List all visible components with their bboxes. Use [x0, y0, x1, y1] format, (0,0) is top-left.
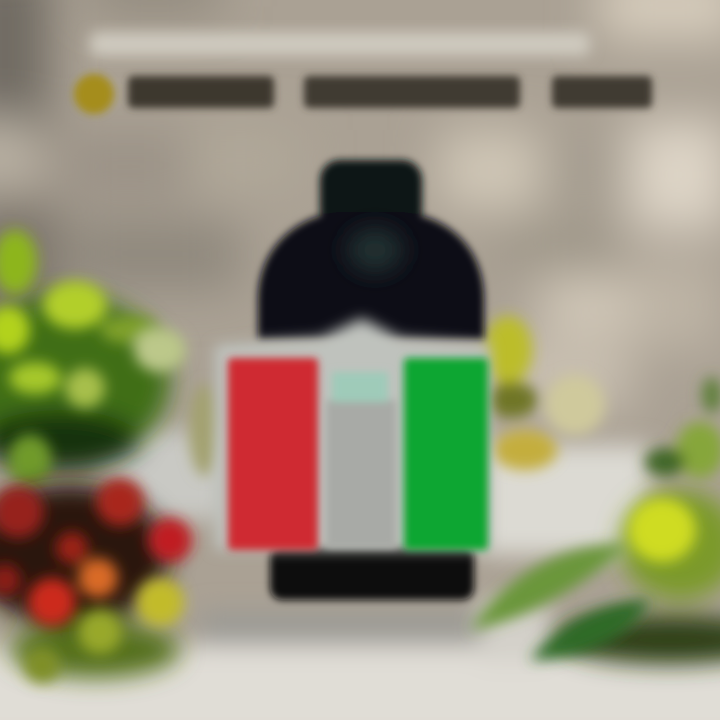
icon: yellow badge [74, 74, 114, 114]
heading: blurred title [74, 74, 652, 114]
heading: blurred subtitle line [90, 32, 590, 56]
bottle highlight [347, 228, 403, 272]
bottle cap and shoulders [258, 160, 484, 340]
label: grey centre panel [326, 372, 396, 548]
label: green panel [404, 358, 488, 550]
background: marble surface [0, 430, 720, 720]
label: red panel [228, 358, 318, 550]
bottle base [270, 545, 474, 600]
label backing [215, 318, 490, 550]
left plant: green foliage [0, 230, 186, 486]
right plant: yellow-green leaves [470, 377, 720, 664]
fruit behind the bottle [189, 316, 605, 476]
left plant: red berries [0, 478, 192, 683]
bottle [215, 160, 490, 600]
